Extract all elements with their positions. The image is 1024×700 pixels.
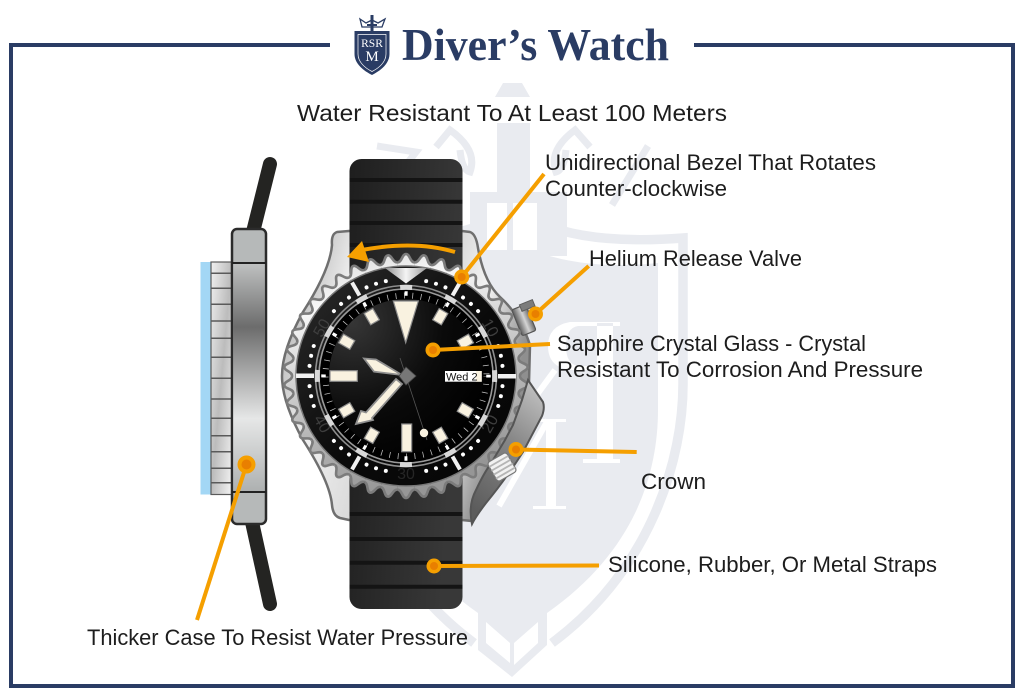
side bezel	[211, 262, 232, 494]
bezel numbers: 10	[478, 316, 501, 340]
watermark: crest shield	[343, 83, 683, 677]
strap	[350, 159, 462, 609]
callout: straps	[426, 552, 937, 577]
callout: thicker case	[87, 456, 468, 650]
front view of watch	[280, 159, 545, 609]
logo: crest icon	[354, 15, 390, 75]
case silhouette	[282, 231, 530, 521]
chapter ring	[324, 294, 488, 458]
callout: helium valve	[528, 246, 802, 322]
helium valve	[512, 300, 536, 336]
side glass	[200, 262, 211, 494]
hour markers	[330, 301, 473, 452]
callout: sapphire crystal	[426, 331, 923, 382]
hand pivot	[399, 367, 416, 385]
bezel	[296, 266, 516, 486]
bezel numbers: 20	[479, 412, 502, 436]
crown guard	[471, 380, 544, 524]
callout: bezel	[454, 150, 876, 284]
dial	[329, 299, 483, 453]
bezel triangle pointer	[385, 268, 427, 284]
subtitle: Water Resistant To At Least 100 Meters	[297, 100, 727, 126]
callout: crown	[508, 442, 706, 494]
bezel numbers: 30	[397, 466, 415, 483]
crown	[487, 452, 517, 482]
bezel numbers	[310, 316, 502, 483]
bezel numbers: 40	[310, 412, 333, 436]
hour hand	[364, 358, 402, 375]
side view of watch	[200, 164, 270, 604]
callout: sapphire crystal: Resistant To Corrosion And Pressure	[557, 357, 923, 382]
logo: crest icon: M	[365, 49, 379, 65]
callout: bezel: Unidirectional Bezel That Rotates	[545, 150, 876, 175]
date window: Wed 2	[446, 372, 478, 384]
scalloped bezel edge	[283, 252, 529, 500]
bezel dots	[307, 279, 505, 473]
silver rehaut ring	[316, 286, 496, 466]
callout: straps: Silicone, Rubber, Or Metal Straps	[608, 552, 937, 577]
logo: crest icon: RSR	[361, 38, 383, 50]
side case	[232, 229, 266, 524]
callout: helium valve: Helium Release Valve	[589, 246, 802, 271]
title: Diver’s Watch	[402, 20, 669, 70]
bezel numbers: 50	[311, 316, 334, 340]
callout: sapphire crystal: Sapphire Crystal Glass - Crystal	[557, 331, 866, 356]
side strap bottom	[252, 522, 270, 604]
second hand	[400, 358, 428, 440]
rotation arrow	[347, 241, 455, 262]
minute hand	[356, 379, 402, 424]
callout: crown: Crown	[641, 469, 706, 494]
bezel white bars	[296, 281, 516, 471]
callout: bezel: Counter-clockwise	[545, 176, 727, 201]
side strap top	[253, 164, 270, 232]
callout: thicker case: Thicker Case To Resist Water Pressure	[87, 625, 468, 650]
